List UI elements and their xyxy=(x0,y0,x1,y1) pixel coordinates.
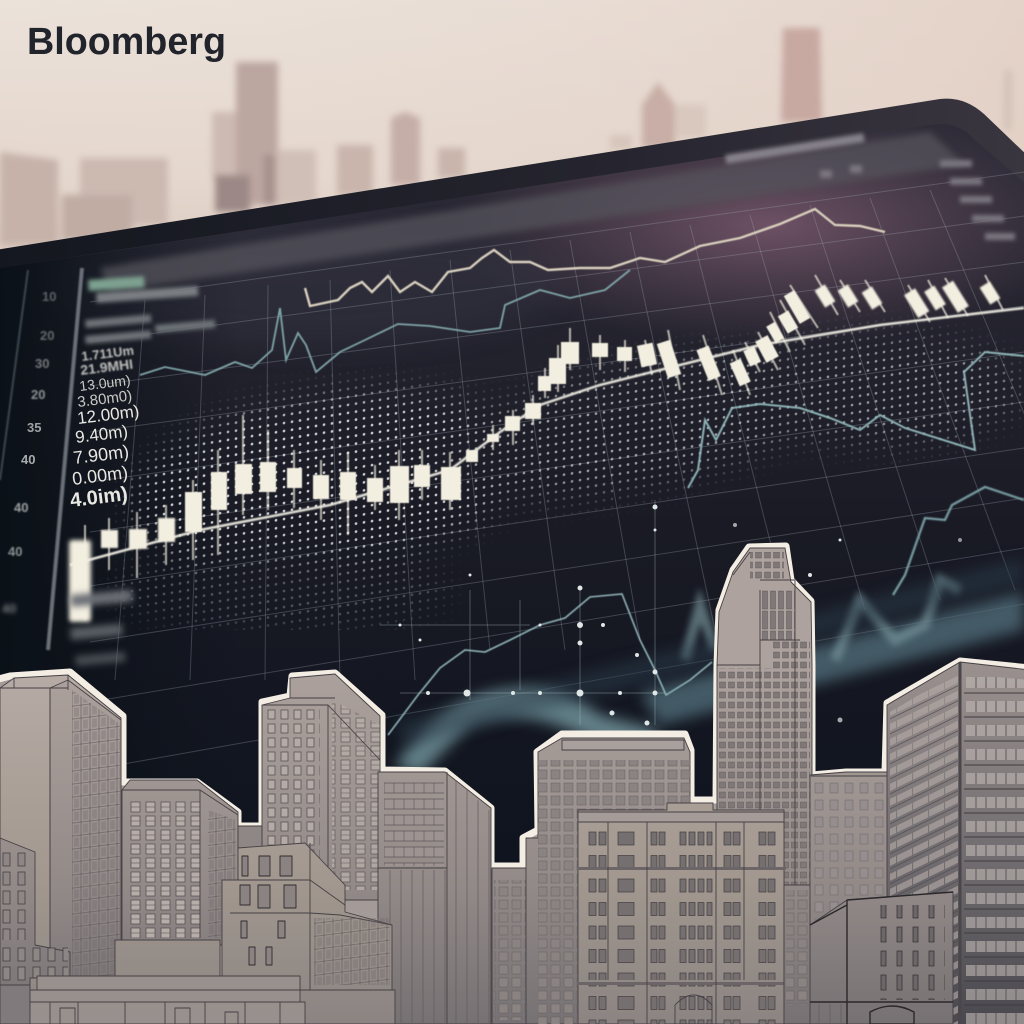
axis values: 3.80m0) xyxy=(76,387,133,411)
building: right striped block xyxy=(810,772,898,925)
left panel edge xyxy=(48,268,82,650)
scatter and crosshair dots xyxy=(380,500,962,767)
building: podium slabs xyxy=(0,940,395,1024)
grid lines xyxy=(90,172,1024,770)
candle bodies left xyxy=(69,342,579,622)
axis values: 9.40m) xyxy=(74,422,129,447)
price line: tan xyxy=(305,209,885,306)
left rail numbers: 35 xyxy=(27,420,41,435)
left rail numbers: 40 xyxy=(14,500,28,515)
candle wicks xyxy=(85,275,1003,620)
left rail numbers: 40 xyxy=(8,544,22,559)
top right screen controls xyxy=(725,133,1015,240)
price line: lower centre xyxy=(388,594,712,735)
price line: teal lower right xyxy=(688,352,1024,488)
blurred panel heading xyxy=(85,276,215,344)
Bloomberg logo: Bloomberg xyxy=(27,21,226,63)
trend line: white xyxy=(70,308,1024,565)
building: art deco tower xyxy=(717,548,812,1024)
left rail numbers: 30 xyxy=(35,356,49,371)
price line: teal upper xyxy=(140,270,630,375)
axis values: 12.00m) xyxy=(76,402,140,428)
building: far left low block xyxy=(0,838,70,985)
left panel inner rule xyxy=(0,270,28,480)
axis values: 21.9MHI xyxy=(79,356,134,378)
candle bodies right xyxy=(592,281,1000,386)
halftone dot field xyxy=(100,290,1024,630)
building: left windowed block xyxy=(122,780,238,945)
tablet screen xyxy=(0,125,1024,862)
candlestick chart xyxy=(69,275,1003,622)
price line: far right xyxy=(893,487,1024,595)
building: stacked low block xyxy=(222,843,392,990)
axis values: 13.0um) xyxy=(78,372,131,394)
building: banded office xyxy=(378,772,491,1024)
building: large right tower xyxy=(887,662,1024,1024)
building: rear centre block xyxy=(526,738,690,1024)
left rail numbers: 20 xyxy=(40,328,54,343)
axis values: 1.711Um xyxy=(81,343,135,364)
city skyline illustration xyxy=(0,546,1024,1024)
axis values xyxy=(69,343,140,512)
left rail numbers: 40 xyxy=(2,601,16,616)
blurred lower labels xyxy=(70,590,133,666)
axis values: 7.90m) xyxy=(72,441,130,468)
building: annex beside tower xyxy=(784,885,812,1024)
building: front centre block xyxy=(577,803,786,1024)
building: small front block xyxy=(810,892,953,1024)
left rail numbers: 40 xyxy=(21,452,35,467)
axis values: 4.0im) xyxy=(69,483,129,512)
skyline outline xyxy=(0,546,1024,1024)
axis values: 0.00m) xyxy=(71,462,129,489)
building: back connector xyxy=(238,826,262,862)
building: central left tower xyxy=(262,674,380,900)
background sky xyxy=(0,0,1024,300)
building: far left tower xyxy=(0,675,121,980)
screen header strip xyxy=(100,132,965,292)
left rail numbers: 10 xyxy=(42,289,56,304)
building: narrow annex xyxy=(492,868,533,1024)
left rail numbers xyxy=(2,289,56,616)
blurred teal bands xyxy=(395,570,1024,775)
left rail numbers: 20 xyxy=(31,387,45,402)
blurred skyline xyxy=(0,28,1012,245)
